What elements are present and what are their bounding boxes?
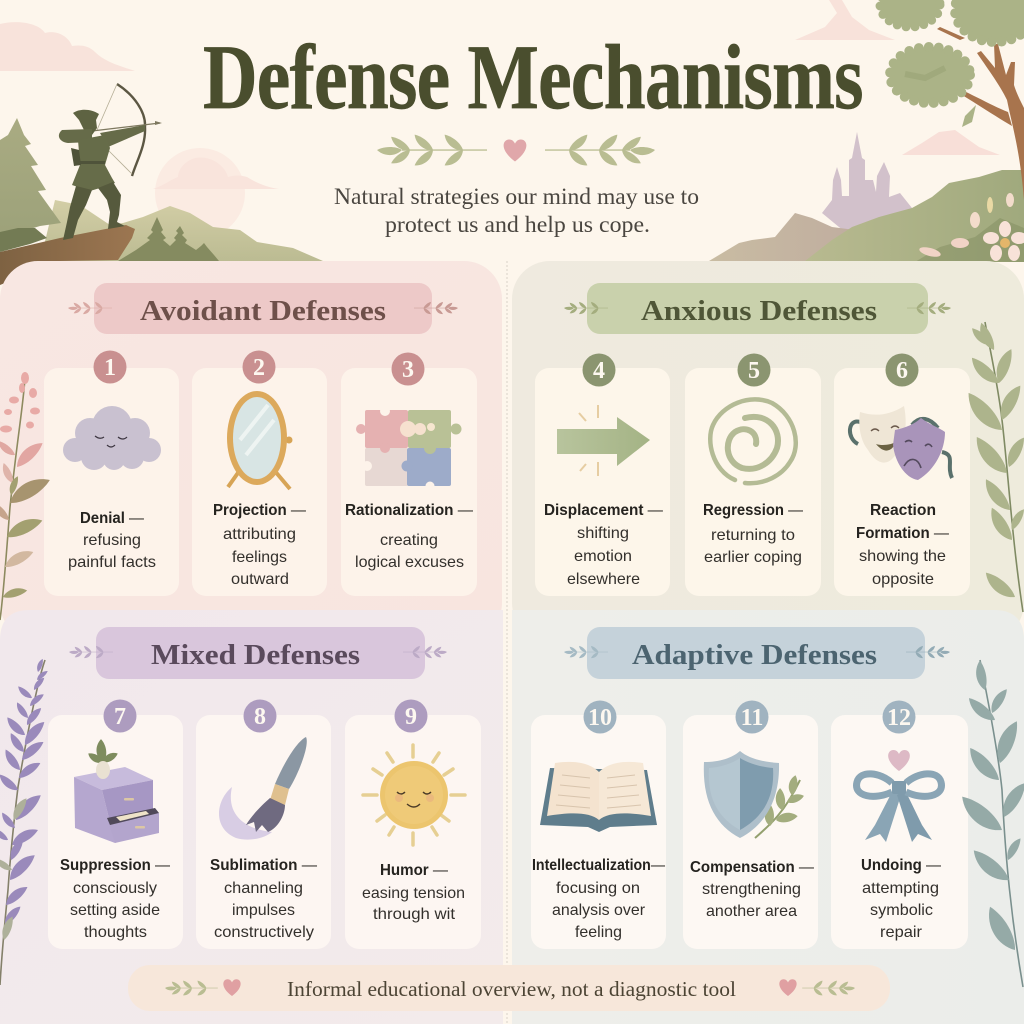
description: Intellectualization—	[532, 857, 665, 874]
number badge 7: 7	[114, 704, 126, 730]
description: easing tension	[362, 885, 465, 902]
icon: arrow	[557, 405, 650, 476]
number badge 10	[584, 700, 616, 734]
icon: theater masks	[850, 406, 952, 480]
panel: adaptive defenses	[512, 610, 1024, 1024]
description: Undoing —	[861, 857, 941, 874]
number badge 1: 1	[104, 355, 116, 381]
description	[856, 502, 949, 588]
description: through wit	[373, 906, 456, 923]
icon: archer with bow	[59, 84, 162, 240]
description: Reaction	[870, 502, 936, 519]
subtitle: Natural strategies our mind may use to	[334, 184, 699, 209]
card 11: compensation	[683, 700, 818, 949]
description: Sublimation —	[210, 857, 317, 874]
description	[690, 859, 814, 920]
description: Formation —	[856, 525, 949, 542]
description	[532, 857, 665, 941]
icon: mirror	[227, 391, 292, 489]
description	[544, 502, 663, 588]
description	[362, 862, 465, 923]
section heading pill: Adaptive Defenses	[632, 639, 877, 671]
header scene: right landscape with castle and tree	[709, 0, 1024, 262]
number badge 7	[104, 700, 136, 732]
number badge 6: 6	[896, 358, 908, 384]
description: emotion	[574, 548, 632, 565]
icon: smiling sun	[363, 745, 465, 845]
description: Compensation —	[690, 859, 814, 876]
card 2: projection	[192, 350, 327, 596]
icon: spiral	[710, 399, 796, 483]
number badge 2	[242, 350, 276, 384]
description: Projection —	[213, 502, 306, 519]
header scene: left landscape with archer	[0, 22, 323, 285]
section heading pill	[69, 627, 447, 679]
icon: shield with branch	[704, 751, 805, 838]
description: outward	[231, 571, 289, 588]
section heading pill: Avoidant Defenses	[140, 295, 386, 327]
description	[861, 857, 941, 941]
description: painful facts	[68, 554, 156, 571]
title divider with sprigs and heart	[377, 132, 655, 169]
number badge 8: 8	[254, 704, 266, 730]
card 7: suppression	[48, 700, 183, 949]
description: feeling	[575, 924, 622, 941]
section heading pill	[68, 283, 458, 334]
description	[60, 857, 170, 941]
description	[213, 502, 306, 588]
vine: olive leaves	[961, 321, 1024, 612]
description: strengthening	[702, 881, 801, 898]
card 6: reaction formation	[834, 354, 970, 596]
subtitle: protect us and help us cope.	[385, 212, 650, 237]
number badge 2: 2	[253, 355, 265, 381]
card 8: sublimation	[196, 700, 331, 949]
description	[68, 510, 156, 571]
description: Humor —	[380, 862, 448, 879]
number badge 5	[738, 354, 770, 386]
description: symbolic	[870, 902, 933, 919]
number badge 4: 4	[593, 358, 605, 384]
description: constructively	[214, 924, 314, 941]
icon: castle	[822, 132, 930, 232]
description: thoughts	[84, 924, 147, 941]
description: repair	[880, 924, 923, 941]
number badge 10: 10	[588, 705, 612, 731]
number badge 11	[736, 700, 768, 734]
card 12: undoing	[831, 700, 968, 949]
vine: lavender	[0, 658, 49, 985]
panel: avoidant defenses	[0, 261, 502, 641]
center vertical divider	[506, 261, 508, 1024]
description	[345, 502, 473, 571]
vine: slate leaves	[955, 660, 1024, 987]
title: Defense Mechanisms	[203, 27, 864, 129]
section heading pill: Mixed Defenses	[151, 639, 360, 671]
icon: open book	[540, 762, 657, 832]
footer note pill	[128, 965, 890, 1011]
description: shifting	[577, 525, 629, 542]
description: showing the	[859, 548, 946, 565]
section heading pill	[564, 283, 951, 334]
icon: ribbon bow with heart	[857, 750, 941, 842]
description: channeling	[224, 880, 303, 897]
card 10: intellectualization	[531, 700, 666, 949]
small pines	[118, 217, 219, 261]
description: elsewhere	[567, 571, 640, 588]
card 5: regression	[685, 354, 821, 596]
card 9: humor	[345, 700, 481, 949]
card 3: rationalization	[341, 352, 477, 596]
number badge 6	[886, 354, 918, 386]
number badge 3: 3	[402, 357, 414, 383]
description: earlier coping	[704, 549, 802, 566]
description: consciously	[73, 880, 157, 897]
description: refusing	[83, 532, 141, 549]
number badge 1	[94, 350, 126, 384]
description: returning to	[711, 527, 795, 544]
icon: puzzle	[356, 406, 462, 490]
description: focusing on	[556, 880, 640, 897]
description: another area	[706, 903, 797, 920]
section heading pill: Anxious Defenses	[641, 295, 877, 327]
description	[210, 857, 317, 941]
icon: paint brush	[219, 737, 307, 840]
card 1: denial	[44, 350, 179, 596]
description	[703, 502, 803, 566]
icon: drawer cabinet with plant	[74, 739, 159, 843]
description: attempting	[862, 880, 939, 897]
icon: cloud	[63, 406, 161, 470]
card 4: displacement	[535, 354, 670, 596]
section heading pill	[564, 627, 950, 679]
number badge 11: 11	[741, 705, 763, 731]
icon: blossoms	[915, 193, 1024, 262]
description: setting aside	[70, 902, 160, 919]
panel: mixed defenses	[0, 610, 503, 1024]
number badge 3	[392, 352, 424, 386]
subtitle	[334, 184, 699, 237]
number badge 9: 9	[405, 704, 417, 730]
number badge 4	[582, 354, 616, 386]
description: Denial —	[80, 510, 144, 527]
description: attributing	[223, 526, 296, 543]
description: Suppression —	[60, 857, 170, 874]
description: analysis over	[552, 902, 646, 919]
number badge 12	[882, 700, 916, 734]
number badge 8	[244, 700, 276, 732]
description: impulses	[232, 902, 295, 919]
description: Displacement —	[544, 502, 663, 519]
vine: pink blossoms	[0, 372, 53, 620]
panel: anxious defenses	[512, 261, 1024, 641]
description: logical excuses	[355, 554, 464, 571]
description: opposite	[872, 571, 934, 588]
description: creating	[380, 532, 438, 549]
description: Rationalization —	[345, 502, 473, 519]
number badge 9	[394, 700, 428, 732]
footer note pill: Informal educational overview, not a diagnostic tool	[287, 977, 736, 1001]
number badge 5: 5	[748, 358, 760, 384]
description: feelings	[232, 549, 287, 566]
description: Regression —	[703, 502, 803, 519]
number badge 12: 12	[887, 705, 911, 731]
